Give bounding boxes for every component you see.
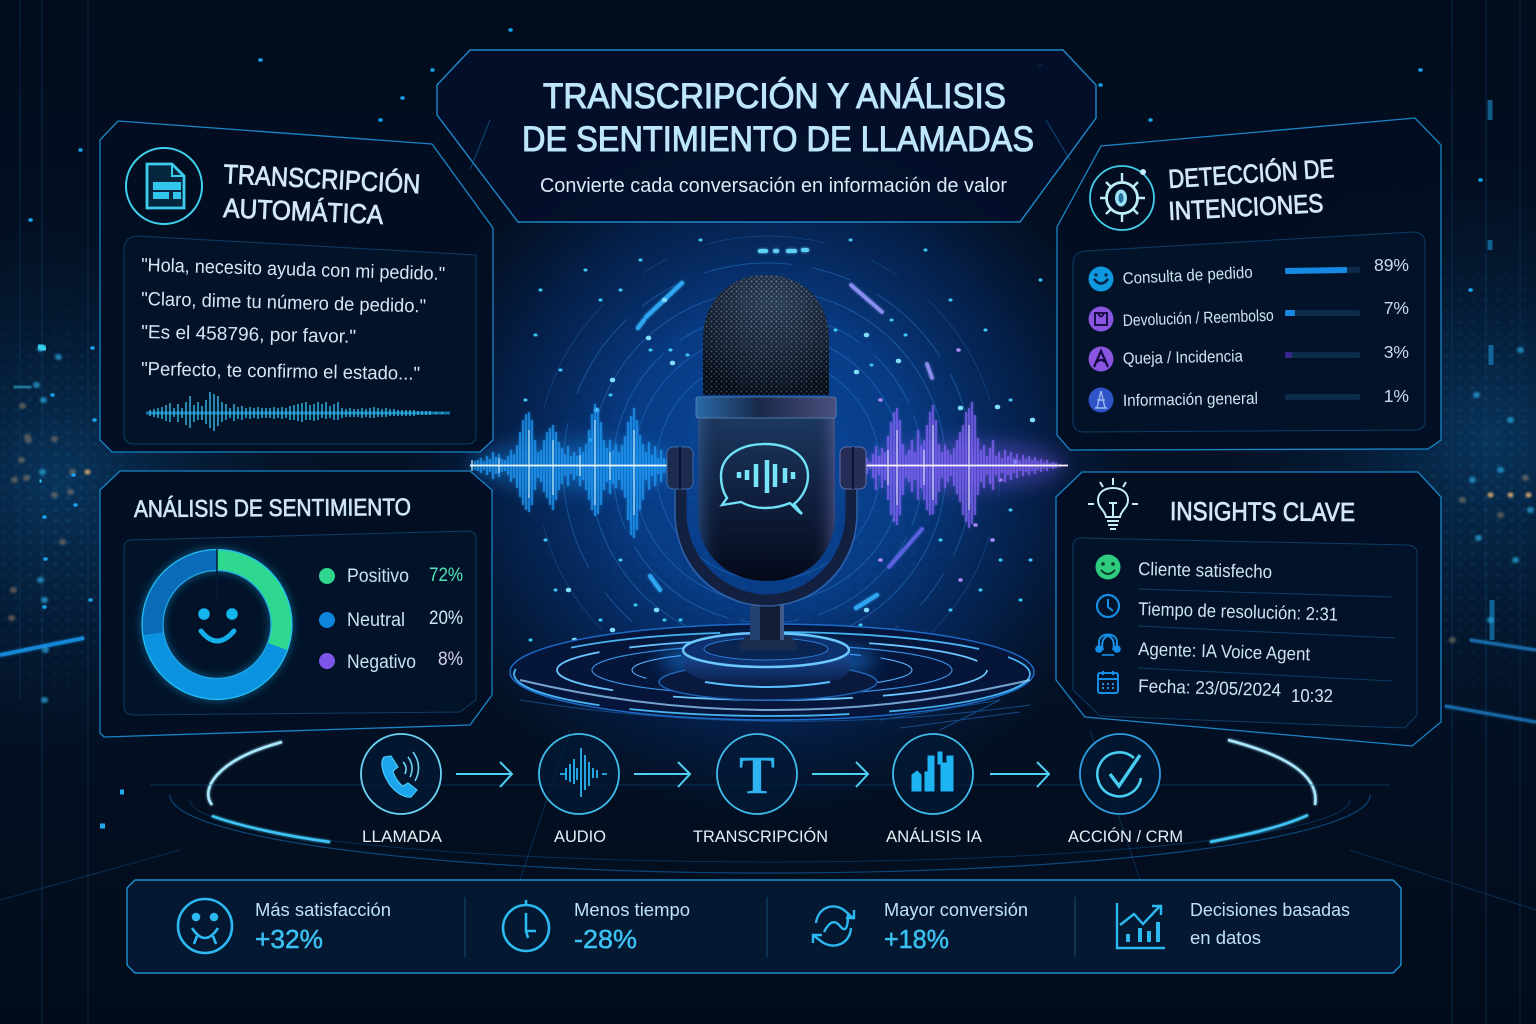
title text: DE SENTIMIENTO DE LLAMADAS <box>522 120 1034 159</box>
row: devolución / reembolso: 7% <box>1384 298 1409 318</box>
legend: sentiment: Positivo <box>347 566 409 587</box>
panel: detección de intenciones <box>1057 118 1441 450</box>
microphone body <box>696 397 836 581</box>
arrow <box>812 762 868 787</box>
legend: sentiment <box>319 565 463 673</box>
benefit: satisfacción <box>178 899 391 954</box>
benefit: decisiones: Decisiones basadas <box>1190 900 1350 920</box>
transcript lines: "Perfecto, te confirmo el estado..." <box>141 359 420 385</box>
benefit: decisiones: en datos <box>1190 928 1261 948</box>
row: tiempo de resolución: Tiempo de resolución: 2:31 <box>1138 598 1338 625</box>
microphone cradle <box>667 447 866 606</box>
icon: lightbulb <box>1088 478 1138 529</box>
icon: bars <box>912 752 953 791</box>
step: audio <box>539 734 619 846</box>
legend: sentiment: 20% <box>429 608 463 629</box>
benefit: tiempo: Menos tiempo <box>574 900 690 920</box>
central glow rings around microphone <box>525 236 1041 700</box>
row: queja / incidencia: Queja / Incidencia <box>1123 347 1244 368</box>
subtitle: Convierte cada conversación en información de valor <box>540 175 1007 197</box>
step: análisis IA: ANÁLISIS IA <box>886 827 983 846</box>
benefit: decisiones <box>1117 900 1350 948</box>
row: tiempo de resolución <box>1097 595 1338 625</box>
arrow <box>990 762 1049 787</box>
heading: transcripción automática: AUTOMÁTICA <box>223 193 384 230</box>
title panel <box>437 50 1096 222</box>
legend: sentiment: Negativo <box>347 652 416 673</box>
benefit: tiempo <box>503 900 690 954</box>
legend: sentiment: Neutral <box>347 610 405 631</box>
arrow <box>634 762 690 787</box>
panel: transcripción automática <box>100 121 493 452</box>
benefit: conversión: +18% <box>884 924 949 954</box>
icon: document <box>126 148 202 224</box>
row: agente: Agente: IA Voice Agent <box>1138 638 1310 664</box>
microphone base <box>659 603 877 700</box>
benefit: satisfacción: +32% <box>255 924 323 954</box>
transcript lines: "Claro, dime tu número de pedido." <box>141 289 426 317</box>
row: cliente satisfecho: Cliente satisfecho <box>1138 558 1272 582</box>
benefit: conversión <box>813 900 1028 954</box>
icon: growth chart <box>1117 903 1165 948</box>
step: llamada <box>361 734 443 846</box>
step: acción / CRM <box>1068 734 1183 846</box>
row: fecha: Fecha: 23/05/2024 <box>1138 675 1281 700</box>
legend: sentiment: 72% <box>429 565 463 586</box>
benefit: tiempo: -28% <box>574 924 637 954</box>
heading: transcripción automática: TRANSCRIPCIÓN <box>223 158 421 199</box>
heading: insights clave: INSIGHTS CLAVE <box>1170 496 1355 527</box>
process flow <box>361 734 1183 846</box>
step: llamada: LLAMADA <box>362 827 443 846</box>
heading: detección de intenciones <box>1167 153 1335 226</box>
step: análisis IA <box>886 734 983 846</box>
row: queja / incidencia: 3% <box>1384 342 1409 362</box>
platform rings under microphone <box>510 624 1034 730</box>
icon: check <box>1097 752 1141 796</box>
process orbit rings <box>0 730 1536 910</box>
row: consulta de pedido: Consulta de pedido <box>1122 264 1253 288</box>
heading: detección de intenciones: DETECCIÓN DE <box>1167 153 1335 194</box>
benefit: conversión: Mayor conversión <box>884 900 1028 920</box>
heading: análisis de sentimiento: ANÁLISIS DE SENTIMIENTO <box>134 494 411 523</box>
title text: TRANSCRIPCIÓN Y ANÁLISIS <box>543 77 1006 116</box>
benefit: satisfacción: Más satisfacción <box>255 900 391 920</box>
row: agente <box>1095 634 1310 664</box>
panel: benefits bar <box>127 880 1401 973</box>
row: información general <box>1088 386 1409 412</box>
row: devolución / reembolso: Devolución / Reembolso <box>1123 307 1274 330</box>
panel: insights clave <box>1056 472 1441 746</box>
sound wave: right purple <box>860 402 1068 528</box>
microphone <box>657 275 877 700</box>
row: fecha: 10:32 <box>1291 685 1333 706</box>
arrow <box>456 762 512 787</box>
icon: letter T: T <box>739 745 775 805</box>
row: consulta de pedido: 89% <box>1374 255 1409 275</box>
icon: speech bubble with voice bars <box>721 444 808 514</box>
microphone grille <box>703 275 829 395</box>
panel: análisis de sentimiento <box>100 471 492 737</box>
icon: smile face <box>178 899 232 953</box>
icon: audio wave <box>560 748 607 797</box>
transcript lines <box>141 255 445 385</box>
row: cliente satisfecho <box>1096 554 1272 582</box>
donut chart: sentiment <box>142 549 292 700</box>
icon: refresh arrows <box>813 906 854 946</box>
row: consulta de pedido <box>1088 255 1409 292</box>
step: transcripción: TRANSCRIPCIÓN <box>693 827 828 846</box>
step: transcripción <box>693 734 828 846</box>
icon: target <box>1090 166 1154 230</box>
title text <box>522 77 1034 159</box>
sound wave: left blue <box>470 404 682 538</box>
icon: phone <box>382 756 417 797</box>
row: información general: 1% <box>1384 386 1409 406</box>
heading: transcripción automática <box>223 158 421 230</box>
heading: detección de intenciones: INTENCIONES <box>1168 188 1324 226</box>
transcript lines: "Hola, necesito ayuda con mi pedido." <box>141 255 445 285</box>
row: devolución / reembolso <box>1088 298 1409 332</box>
icon: clock <box>503 900 549 951</box>
row: queja / incidencia <box>1088 342 1409 372</box>
legend: sentiment: 8% <box>438 649 463 670</box>
step: audio: AUDIO <box>554 827 606 846</box>
step: acción / CRM: ACCIÓN / CRM <box>1068 827 1183 846</box>
icon: smiley <box>198 608 238 641</box>
row: fecha <box>1098 671 1333 706</box>
transcript lines: "Es el 458796, por favor." <box>141 322 356 348</box>
row: información general: Información general <box>1123 390 1258 410</box>
icon: signal arcs <box>403 752 419 781</box>
small transcript waveform <box>146 392 450 431</box>
